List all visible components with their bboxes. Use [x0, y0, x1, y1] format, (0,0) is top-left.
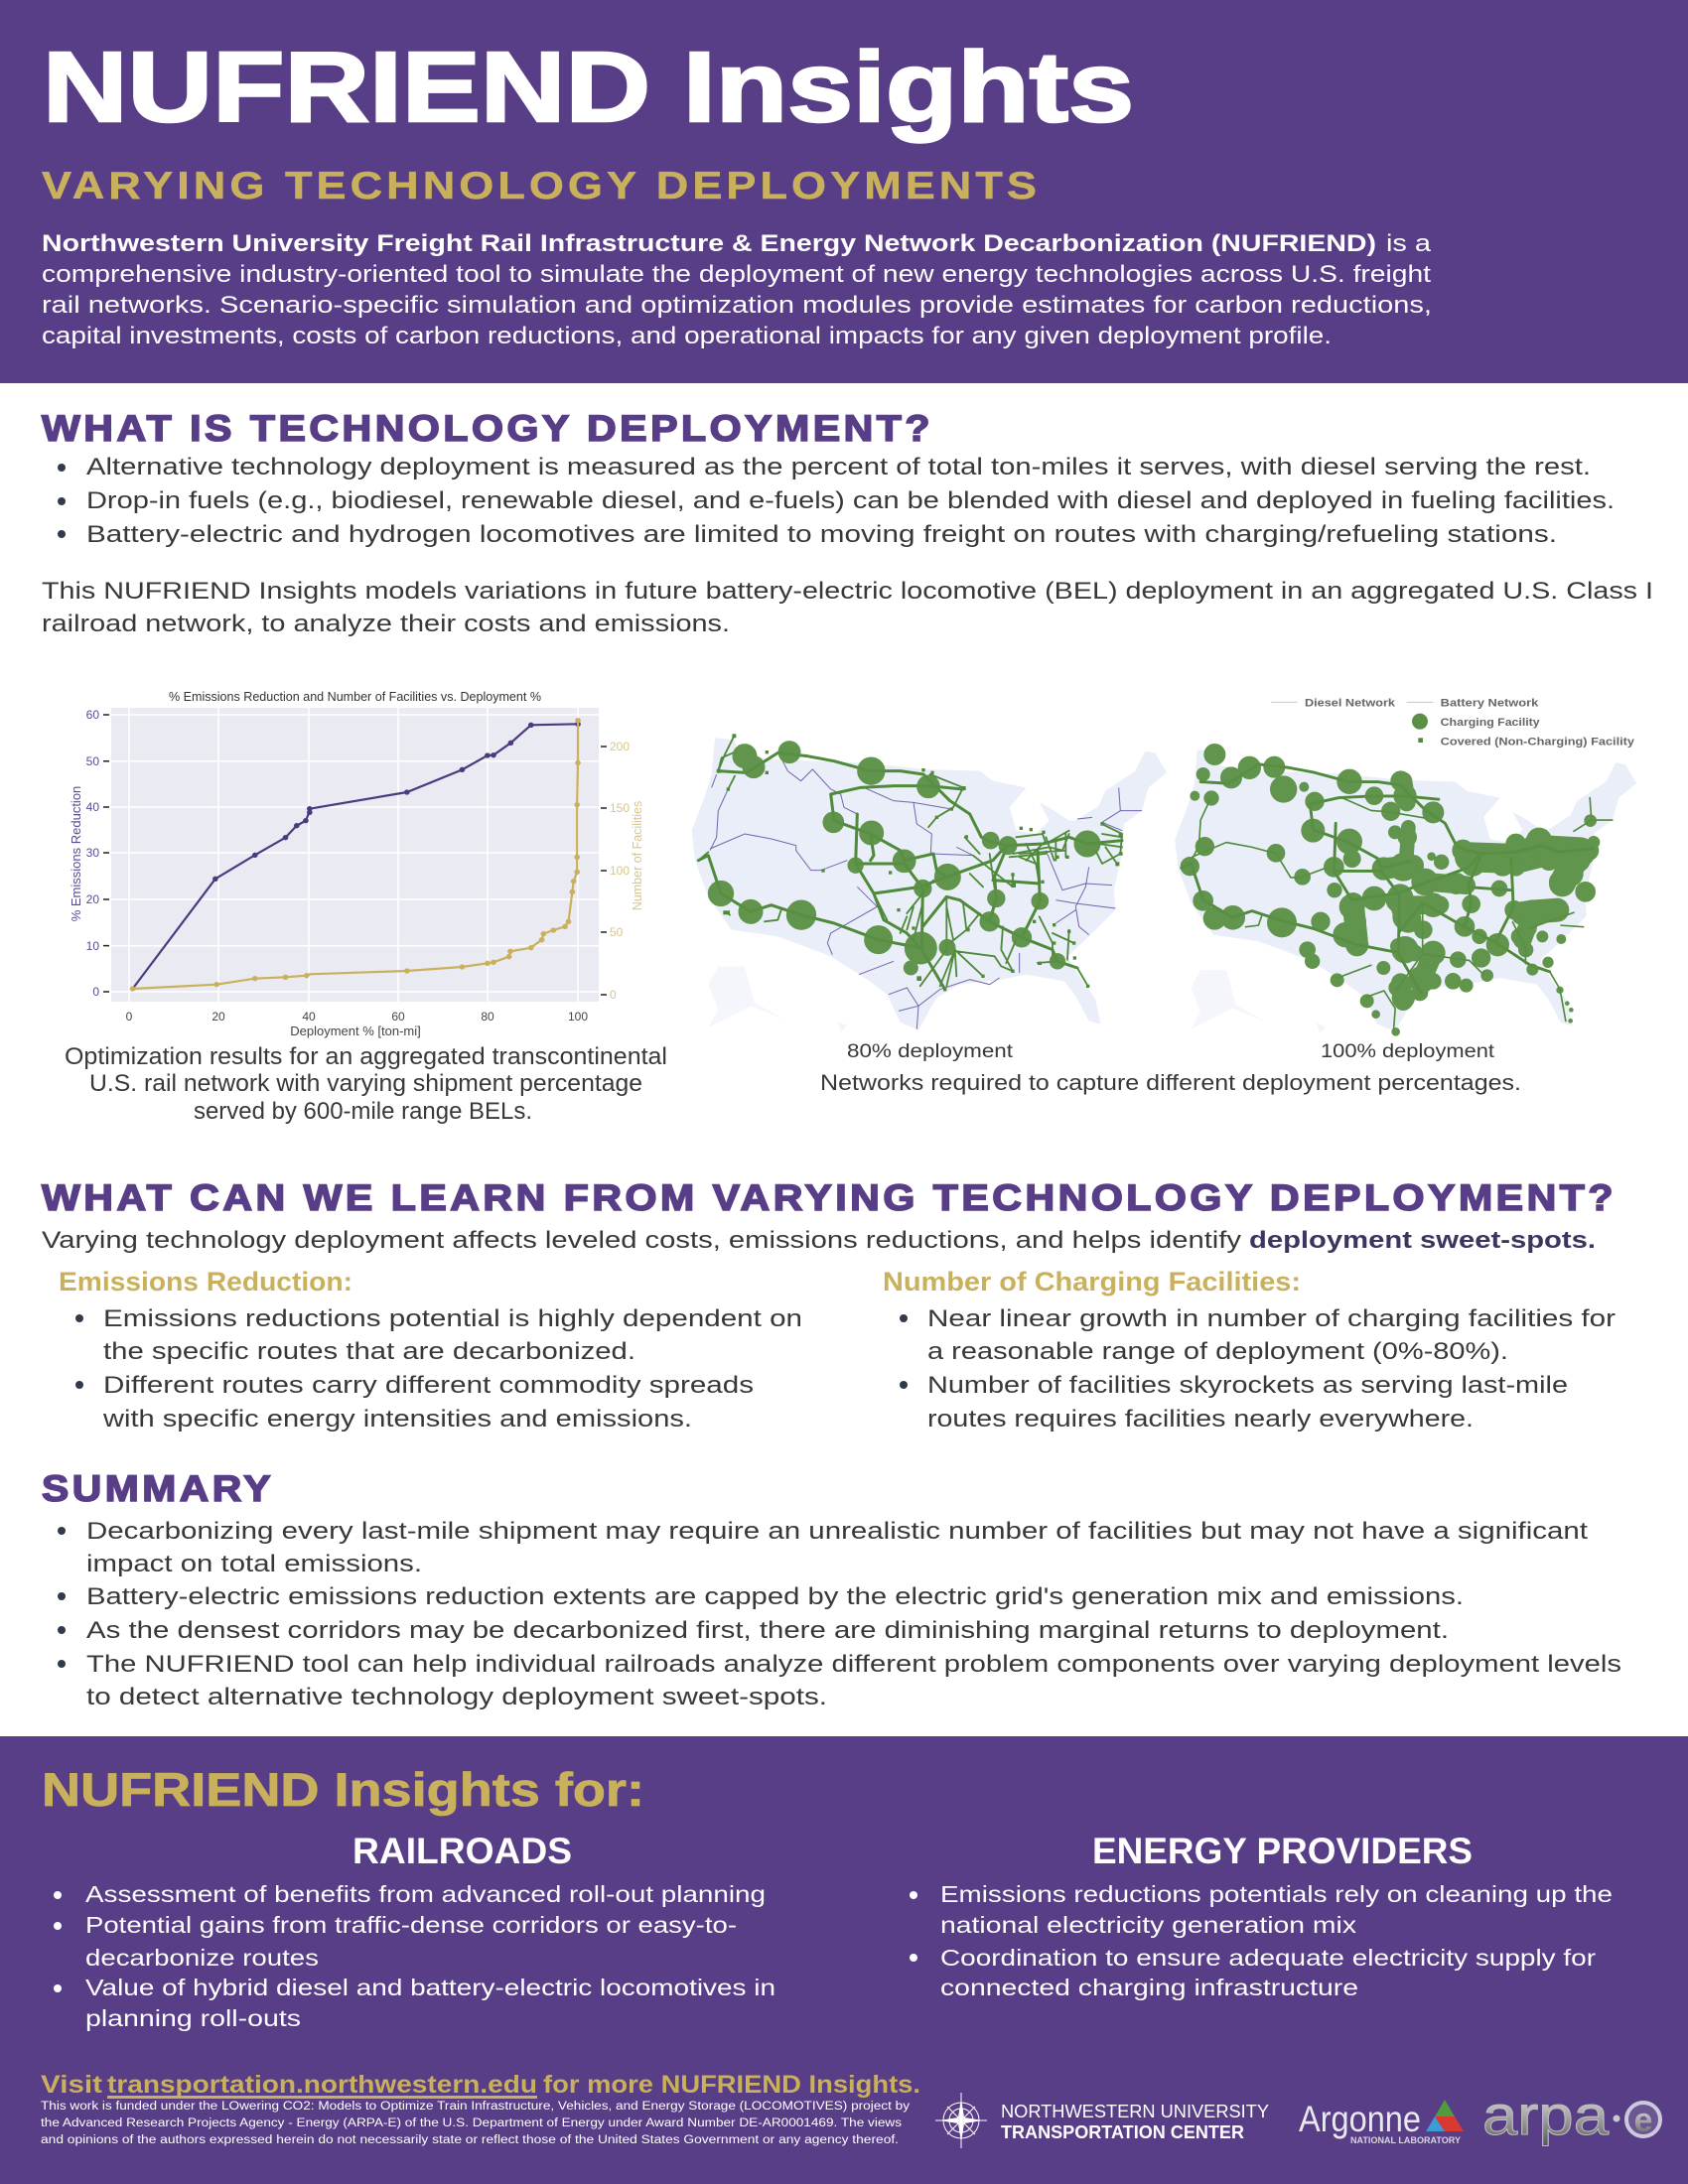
line chart: emissions reduction and facilities vs deployment: 50 — [610, 925, 624, 939]
railroads column: Value of hybrid diesel and battery-electric locomotives in — [85, 1975, 775, 2000]
charging facilities heading: Number of Charging Facilities: — [883, 1267, 1301, 1297]
logo: Northwestern University Transportation Center: TRANSPORTATION CENTER — [1001, 2122, 1244, 2142]
bullet list: deployment definitions: Alternative technology deployment is measured as the percent of total ton-miles it serves, with diesel serving the rest. — [86, 454, 1591, 480]
lead sentence: Varying technology deployment affects leveled costs, emissions reductions, and helps identify — [42, 1227, 1242, 1254]
logo: ARPA-E: arpa — [1482, 2084, 1610, 2146]
website link line: for more NUFRIEND Insights. — [543, 2071, 920, 2099]
intro paragraph: is a — [1386, 230, 1431, 257]
US base map — [1175, 750, 1636, 1033]
line chart: emissions reduction and facilities vs deployment: 100 — [610, 864, 630, 878]
intro paragraph: capital investments, costs of carbon reductions, and operational impacts for any given deployment profile. — [42, 323, 1332, 349]
dense corridor bands — [1353, 781, 1581, 1001]
panel: emissions reduction: the specific routes that are decarbonized. — [103, 1338, 635, 1365]
line chart: emissions reduction and facilities vs deployment — [69, 690, 644, 1038]
chart caption: served by 600-mile range BELs. — [194, 1098, 532, 1125]
title: NUFRIEND Insights — [43, 32, 1134, 143]
railroads column: planning roll-outs — [85, 2005, 301, 2031]
line chart: emissions reduction and facilities vs deployment: 40 — [86, 800, 99, 814]
heading: summary: SUMMARY — [42, 1467, 274, 1509]
heading: what can we learn: WHAT CAN WE LEARN FROM VARYING TECHNOLOGY DEPLOYMENT? — [42, 1176, 1617, 1218]
map: 100% deployment network — [1175, 698, 1636, 1035]
heading: what is technology deployment: WHAT IS TECHNOLOGY DEPLOYMENT? — [42, 407, 933, 449]
railroads column: RAILROADS — [352, 1831, 572, 1871]
panel: emissions reduction: Different routes carry different commodity spreads — [103, 1372, 754, 1399]
paragraph: scope of this study: railroad network, to analyze their costs and emissions. — [42, 611, 730, 637]
lead sentence — [42, 1227, 1596, 1254]
line chart: emissions reduction and facilities vs deployment: % Emissions Reduction and Number of Facilities vs. Deployment % — [169, 690, 541, 704]
map captions: 100% deployment — [1321, 1041, 1495, 1062]
bullet list: summary: to detect alternative technology deployment sweet-spots. — [86, 1684, 827, 1710]
logo: ARPA-E — [1482, 2084, 1660, 2146]
logo: Argonne National Laboratory: Argonne — [1299, 2099, 1421, 2139]
network lines — [1182, 764, 1613, 1030]
panel: number of charging facilities: a reasonable range of deployment (0%-80%). — [927, 1338, 1508, 1365]
line chart: emissions reduction and facilities vs deployment: 150 — [610, 801, 630, 815]
bullet list: deployment definitions — [58, 454, 1615, 548]
line chart: emissions reduction and facilities vs deployment: 40 — [302, 1010, 316, 1024]
energy providers column: national electricity generation mix — [940, 1912, 1356, 1938]
diesel network lines — [710, 757, 1142, 1029]
website link line: transportation.northwestern.edu — [107, 2071, 537, 2099]
line chart: emissions reduction and facilities vs deployment: 20 — [211, 1010, 225, 1024]
map legend: Covered (Non-Charging) Facility — [1441, 737, 1634, 749]
bullet list: summary — [58, 1518, 1621, 1710]
funding disclaimer: This work is funded under the LOwering CO2: Models to Optimize Train Infrastructure, Vehicles, and Energy Storage (LOCOMOTIVES) project by — [41, 2101, 910, 2113]
map captions: 80% deployment — [847, 1041, 1014, 1062]
line chart: emissions reduction and facilities vs deployment: Number of Facilities — [631, 801, 644, 910]
energy providers column: ENERGY PROVIDERS — [1092, 1831, 1473, 1871]
footer heading: NUFRIEND Insights for: — [42, 1763, 644, 1816]
map legend — [1271, 698, 1634, 749]
energy providers column — [910, 1831, 1613, 2000]
line chart: emissions reduction and facilities vs deployment: 80 — [481, 1010, 494, 1024]
covered facility markers — [717, 734, 1123, 991]
logo: Northwestern University Transportation Center — [935, 2093, 1269, 2148]
chart caption — [65, 1043, 667, 1125]
line chart: emissions reduction and facilities vs deployment: 50 — [86, 754, 99, 768]
line chart: emissions reduction and facilities vs deployment: % Emissions Reduction — [69, 786, 83, 921]
energy providers column: Emissions reductions potentials rely on cleaning up the — [940, 1881, 1613, 1907]
railroads column: decarbonize routes — [85, 1945, 319, 1971]
funding disclaimer: the Advanced Research Projects Agency - Energy (ARPA-E) of the U.S. Department of Energy under Award Number DE-AR0001469. The views — [41, 2117, 902, 2129]
funding disclaimer: and opinions of the authors expressed herein do not necessarily state or reflect those of the United States Government or any agency thereof. — [41, 2134, 899, 2146]
bullet list: summary: As the densest corridors may be decarbonized first, there are diminishing marginal returns to deployment. — [86, 1617, 1449, 1644]
railroads column: Assessment of benefits from advanced roll-out planning — [85, 1881, 766, 1907]
line chart: emissions reduction and facilities vs deployment: 10 — [86, 939, 99, 953]
subtitle: VARYING TECHNOLOGY DEPLOYMENTS — [42, 165, 1041, 207]
bullet list: deployment definitions: Drop-in fuels (e.g., biodiesel, renewable diesel, and e-fuels) can be blended with diesel and deployed in fueling facilities. — [86, 487, 1615, 514]
intro paragraph — [42, 230, 1432, 349]
line chart: emissions reduction and facilities vs deployment: 20 — [86, 892, 99, 906]
panel: insights footer — [0, 1736, 1688, 2184]
logo: ARPA-E: e — [1634, 2102, 1652, 2139]
lead sentence: deployment sweet-spots. — [1249, 1227, 1596, 1254]
line chart: emissions reduction and facilities vs deployment: 60 — [391, 1010, 405, 1024]
panel: emissions reduction — [59, 1267, 802, 1433]
paragraph: scope of this study — [42, 578, 1653, 637]
panel: header — [0, 0, 1688, 383]
map legend: Diesel Network — [1305, 698, 1395, 710]
line chart: emissions reduction and facilities vs deployment: 30 — [86, 846, 99, 860]
bullet list: summary: The NUFRIEND tool can help individual railroads analyze different problem components over varying deployment levels — [86, 1651, 1621, 1678]
map captions — [820, 1041, 1521, 1095]
map captions: Networks required to capture different deployment percentages. — [820, 1070, 1521, 1095]
line chart: emissions reduction and facilities vs deployment: 0 — [610, 988, 617, 1002]
logo: Argonne National Laboratory: NATIONAL LABORATORY — [1350, 2135, 1461, 2145]
railroads column: Potential gains from traffic-dense corridors or easy-to- — [85, 1912, 737, 1938]
line chart: emissions reduction and facilities vs deployment: 200 — [610, 740, 630, 753]
panel: number of charging facilities: routes requires facilities nearly everywhere. — [927, 1406, 1474, 1433]
line chart: emissions reduction and facilities vs deployment: 60 — [86, 708, 99, 722]
intro paragraph: Northwestern University Freight Rail Infrastructure & Energy Network Decarbonization (NUFRIEND) — [42, 230, 1376, 257]
logo: Northwestern University Transportation Center: NORTHWESTERN UNIVERSITY — [1001, 2102, 1269, 2121]
panel: emissions reduction: Emissions reductions potential is highly dependent on — [103, 1305, 802, 1332]
website link line: Visit — [41, 2071, 103, 2099]
line chart: emissions reduction and facilities vs deployment: Deployment % [ton-mi] — [290, 1024, 421, 1038]
map legend: Charging Facility — [1441, 717, 1540, 729]
funding disclaimer — [41, 2101, 910, 2146]
railroads column — [54, 1831, 775, 2031]
bullet list: summary: Decarbonizing every last-mile shipment may require an unrealistic number of facilities but may not have a significant — [86, 1518, 1588, 1545]
charging facility circles — [1182, 745, 1599, 1035]
paragraph: scope of this study: This NUFRIEND Insights models variations in future battery-electric locomotive (BEL) deployment in an aggregated U.S. Class I — [42, 578, 1653, 605]
bullet list: deployment definitions: Battery-electric and hydrogen locomotives are limited to moving freight on routes with charging/refueling stations. — [86, 521, 1557, 548]
line chart: emissions reduction and facilities vs deployment: 100 — [568, 1010, 588, 1024]
panel: number of charging facilities: Near linear growth in number of charging facilities for — [927, 1305, 1616, 1332]
map: 80% deployment network — [692, 734, 1167, 1031]
emissions reduction heading: Emissions Reduction: — [59, 1267, 352, 1297]
intro paragraph: comprehensive industry-oriented tool to simulate the deployment of new energy technologies across U.S. freight — [42, 261, 1431, 288]
line chart: emissions reduction and facilities vs deployment: 0 — [92, 985, 99, 999]
panel: number of charging facilities — [883, 1267, 1616, 1433]
panel: number of charging facilities: Number of facilities skyrockets as serving last-mile — [927, 1372, 1568, 1399]
map legend: Battery Network — [1441, 698, 1538, 710]
battery network lines — [698, 738, 1122, 990]
panel: emissions reduction: with specific energy intensities and emissions. — [102, 1406, 692, 1433]
website link line — [41, 2071, 920, 2099]
intro paragraph: rail networks. Scenario-specific simulation and optimization modules provide estimates for carbon reductions, — [42, 292, 1432, 319]
bullet list: summary: impact on total emissions. — [86, 1551, 422, 1577]
line chart: emissions reduction and facilities vs deployment: 0 — [126, 1010, 133, 1024]
charging facility circles — [709, 742, 1100, 975]
energy providers column: Coordination to ensure adequate electricity supply for — [940, 1945, 1596, 1971]
US base map — [692, 738, 1167, 1031]
energy providers column: connected charging infrastructure — [940, 1975, 1358, 2000]
chart caption: Optimization results for an aggregated transcontinental — [65, 1043, 667, 1070]
bullet list: summary: Battery-electric emissions reduction extents are capped by the electric grid's generation mix and emissions. — [86, 1583, 1464, 1610]
chart caption: U.S. rail network with varying shipment percentage — [89, 1070, 642, 1097]
